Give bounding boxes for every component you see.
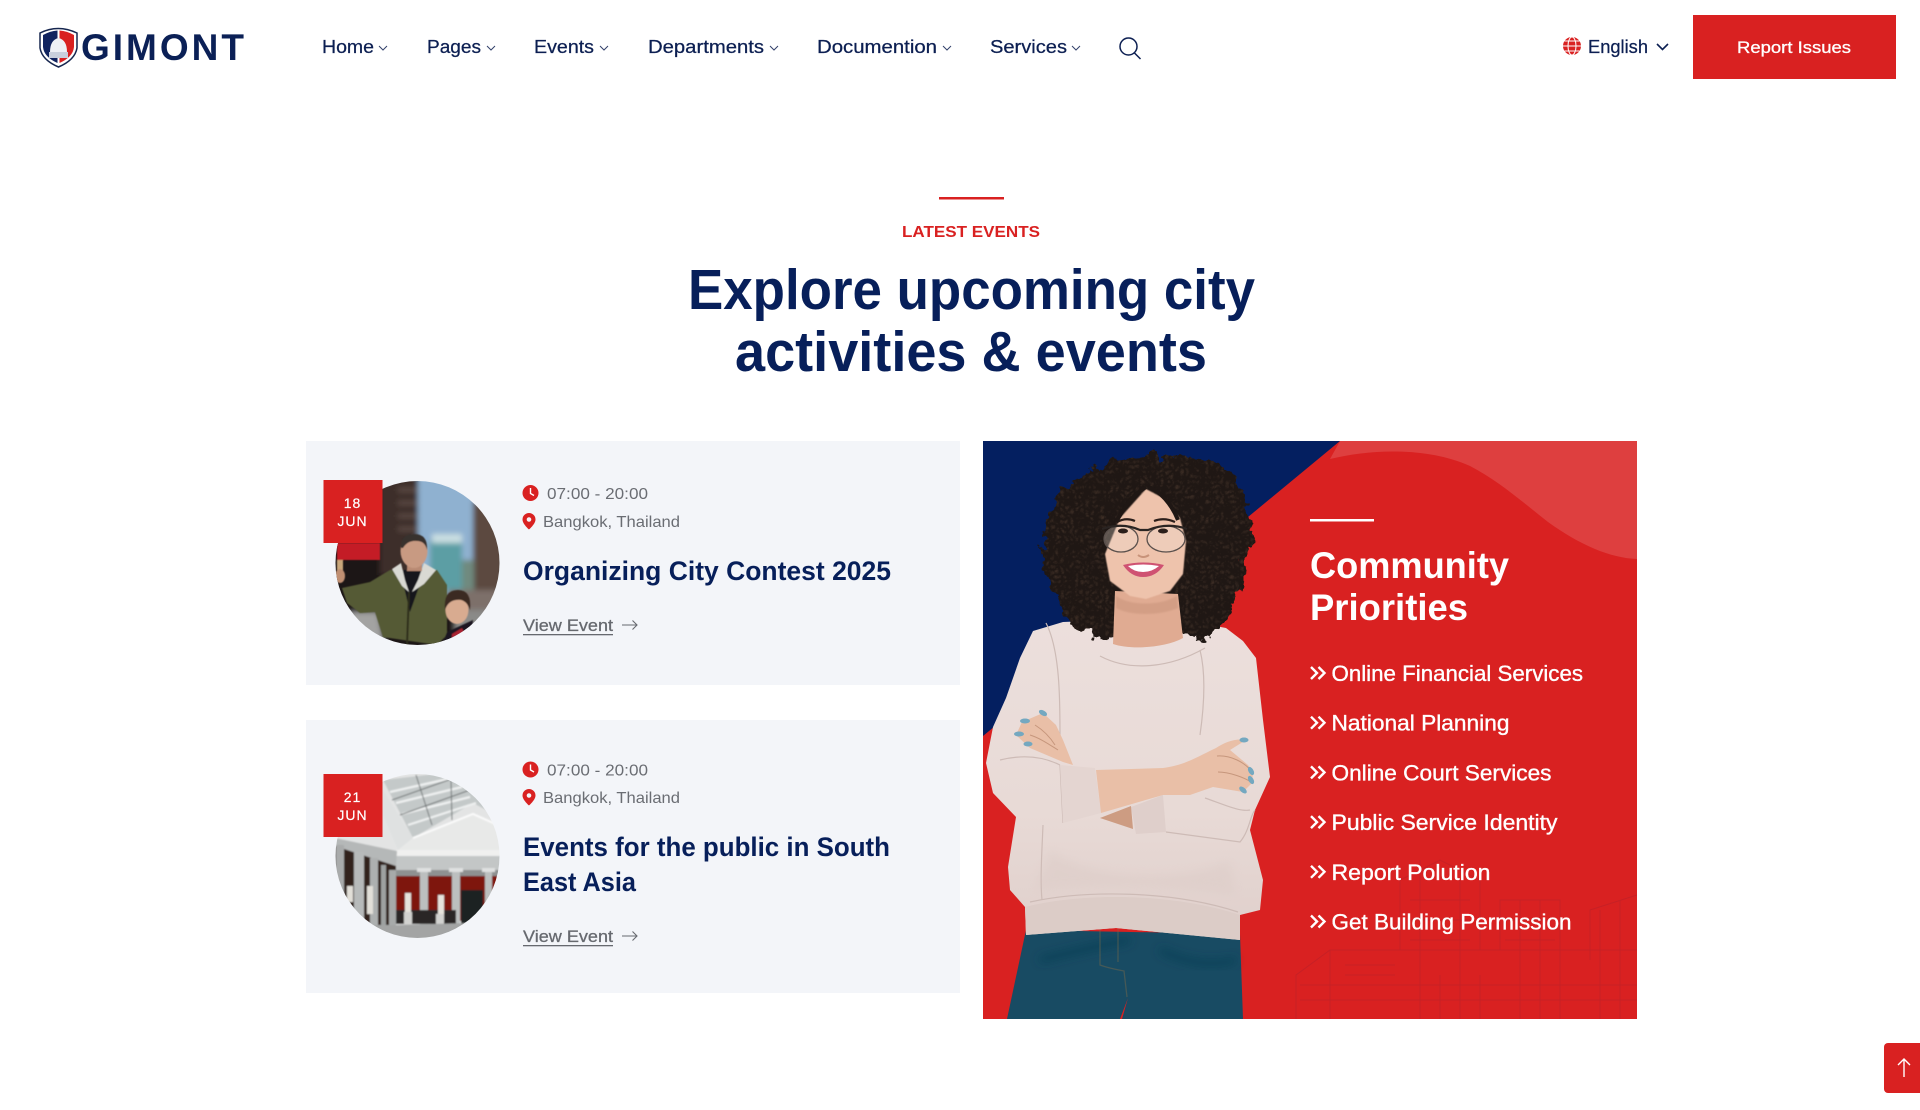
date badge: 18 Jun	[324, 480, 382, 543]
button: Report Issues	[1693, 15, 1896, 79]
date badge: 21 Jun	[324, 774, 382, 837]
panel title: Community	[1310, 545, 1509, 586]
icon: location pin	[522, 513, 536, 530]
nav item: Departments: Departments	[648, 37, 764, 57]
panel title: Priorities	[1310, 587, 1468, 628]
event title: East Asia	[523, 867, 637, 897]
accent line	[1310, 519, 1374, 522]
left hand	[1016, 713, 1073, 765]
list item: Online Financial Services: Online Financial Services	[1332, 661, 1583, 686]
list item: Public Service Identity: Public Service Identity	[1332, 810, 1558, 835]
sweater folds and shadows	[1000, 623, 1255, 912]
photo: man and boy at a city rally	[336, 481, 500, 645]
list item: Online Court Services: Online Court Services	[1332, 760, 1552, 785]
event title: Events for the public in South	[523, 832, 890, 862]
finger lines	[1030, 725, 1252, 782]
building line art	[1296, 860, 1640, 1019]
logo wordmark: GIMONT	[81, 27, 244, 68]
icon: clock	[522, 485, 538, 501]
event location: Bangkok, Thailand	[543, 790, 680, 807]
icon: shield	[40, 28, 77, 67]
list item: Get Building Permission: Get Building Permission	[1332, 910, 1572, 934]
eyebrows	[1117, 519, 1175, 522]
neck	[1113, 591, 1183, 647]
event location: Bangkok, Thailand	[543, 514, 680, 531]
language selector: English	[1588, 37, 1648, 57]
nav item: Events: Events	[534, 37, 594, 57]
date badge: 21 Jun: 21	[344, 789, 361, 805]
icon: search	[1120, 38, 1140, 59]
photo: smiling woman with crossed arms	[986, 456, 1270, 1019]
icon: globe	[1563, 37, 1581, 55]
sweater soft shadow	[1035, 850, 1235, 895]
view event link: View Event	[523, 927, 613, 946]
forearm and right hand	[1096, 739, 1253, 813]
nav item: Pages: Pages	[427, 37, 481, 57]
panel: event card 1	[306, 441, 960, 685]
face	[1102, 489, 1187, 599]
header navigation bar	[40, 15, 1896, 79]
nose shadow	[1138, 555, 1149, 557]
eyes	[1118, 528, 1128, 534]
section heading	[688, 197, 1271, 384]
photo: museum atrium with columns	[336, 774, 500, 938]
language selector	[1563, 37, 1668, 57]
nav item: Services: Services	[990, 37, 1067, 57]
logo: Gimont shield and wordmark	[40, 27, 244, 68]
panel: community priorities	[983, 441, 1640, 1019]
list item: National Planning: National Planning	[1332, 711, 1510, 736]
icon: location pin	[522, 789, 536, 806]
list item: Report Polution: Report Polution	[1332, 860, 1490, 885]
smile	[1123, 562, 1164, 577]
button: scroll to top	[1884, 1043, 1920, 1093]
button: Report Issues: Report Issues	[1737, 38, 1851, 57]
panel: event card 2	[306, 720, 960, 993]
nav item: Documention: Documention	[817, 37, 937, 57]
fringe curls	[1116, 487, 1178, 522]
icon: clock	[522, 762, 538, 778]
glasses top rim	[1102, 526, 1187, 530]
date badge: 18 Jun: JUN	[337, 513, 368, 529]
nav item: Home: Home	[322, 37, 374, 57]
section title: activities & events	[735, 320, 1207, 384]
neck shadow	[1116, 596, 1178, 614]
sweater	[986, 620, 1270, 940]
hair	[1043, 456, 1255, 642]
event title: Organizing City Contest 2025	[523, 556, 891, 586]
jeans	[1007, 929, 1243, 1019]
cuff, viewer left	[1060, 765, 1064, 823]
section title: Explore upcoming city	[688, 258, 1255, 322]
event time: 07:00 - 20:00	[547, 486, 648, 503]
sweater waistband	[1025, 908, 1240, 940]
cuff, viewer right	[1131, 795, 1166, 834]
event time: 07:00 - 20:00	[547, 762, 648, 780]
date badge: 21 Jun: JUN	[337, 807, 368, 823]
glasses	[1104, 526, 1185, 552]
view event link: View Event	[523, 616, 613, 635]
date badge: 18 Jun: 18	[344, 495, 361, 511]
panel background shapes	[983, 441, 1640, 1019]
eyebrow label: LATEST EVENTS	[902, 224, 1040, 241]
painted nails	[1014, 709, 1255, 795]
lower forearm	[1100, 806, 1133, 829]
